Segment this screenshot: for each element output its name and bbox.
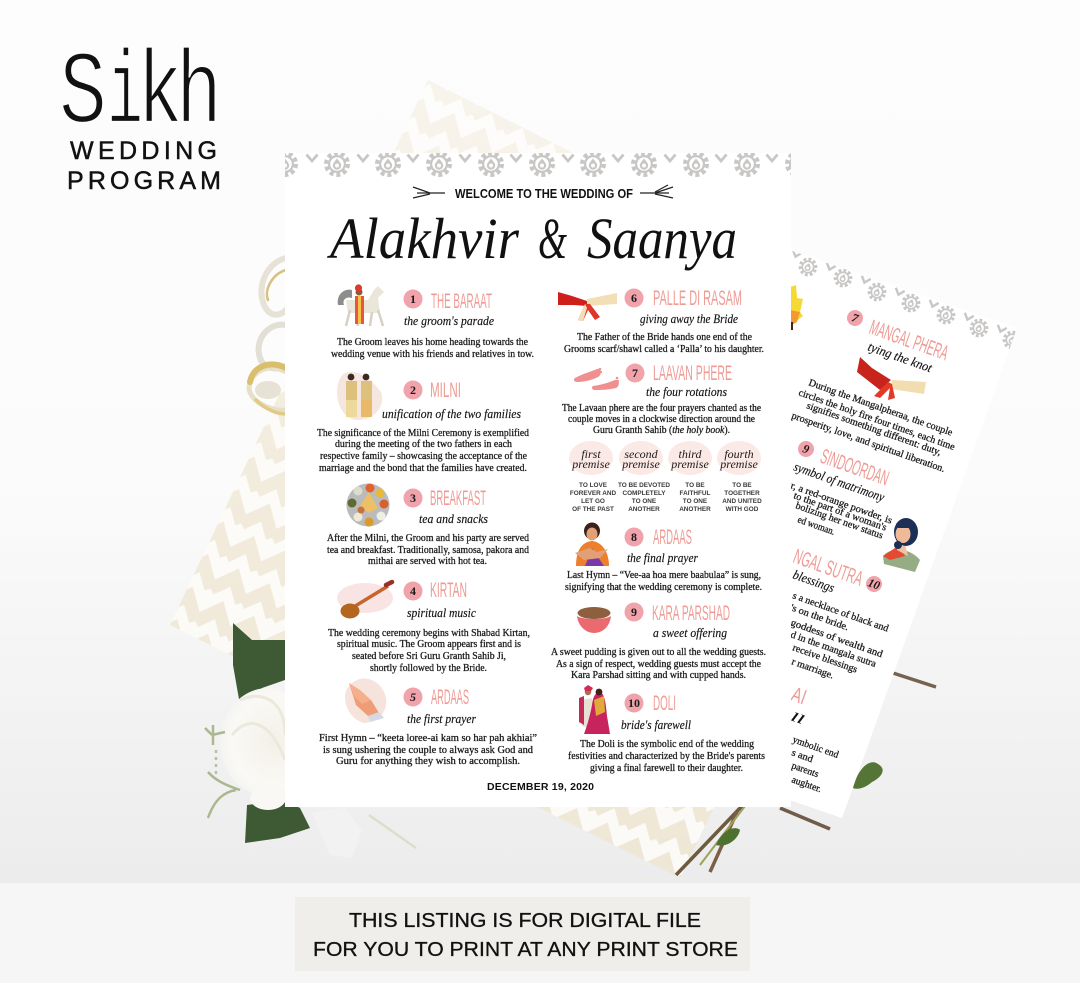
step 5: first ardaas: is sung ushering the couple to always ask God and xyxy=(323,745,533,756)
step 1: the baraat: wedding venue with his friends and relatives in tow. xyxy=(331,349,534,360)
premise 2: TO ONE xyxy=(632,498,657,505)
step 1: the baraat: the groom's parade xyxy=(404,313,494,328)
decorative border strip xyxy=(274,154,808,174)
step 9: kara parshad: 9 xyxy=(631,605,637,619)
icon: tied knot xyxy=(857,357,926,400)
step 4: kirtan: seated before Sri Guru Granth Sahib Ji, xyxy=(352,651,506,662)
step 3: breakfast: tea and snacks xyxy=(419,511,488,526)
back card decorative border xyxy=(791,250,1022,350)
premise 3: ANOTHER xyxy=(679,506,711,513)
step 4: kirtan: KIRTAN xyxy=(430,579,467,602)
back step 7: mangal phera: tying the knot xyxy=(866,339,935,375)
step 3: breakfast: tea and breakfast. Traditionally, samosa, pakora and xyxy=(327,545,529,556)
step 1: the baraat xyxy=(331,284,534,360)
step 5: first ardaas: First Hymn – “keeta loree-ai kam so har pah akhiai” xyxy=(319,733,537,744)
icon: bowl of pudding xyxy=(577,607,611,633)
step 10: doli: giving a final farewell to their daughter. xyxy=(590,763,743,774)
page title: Sikh wedding program: h xyxy=(176,36,222,154)
page title: Sikh wedding program: i xyxy=(107,36,143,154)
page title: Sikh wedding program: S xyxy=(59,36,107,154)
back step 10: mangal sutra: d in the mangala sutra xyxy=(789,629,878,670)
icon: thali plate xyxy=(346,484,390,526)
back step 9: sindoordan: bolizing her new status xyxy=(794,500,884,542)
couple names: Alakhvir xyxy=(326,206,519,271)
icon: praying hands xyxy=(345,678,386,723)
step 10: doli: The Doli is the symbolic end of the wedding xyxy=(580,739,754,750)
back step 10: mangal sutra: goddess of wealth and xyxy=(789,617,884,660)
step 9: kara parshad: a sweet offering xyxy=(653,625,727,640)
back step 7: mangal phera: 7 xyxy=(850,310,861,326)
digital file notice banner: FOR YOU TO PRINT AT ANY PRINT STORE xyxy=(313,938,738,961)
step 3: breakfast: mithai are served with hot tea. xyxy=(368,556,487,567)
step 6: palle di rasam: The Father of the Bride hands one end of the xyxy=(577,332,753,343)
step 10: doli: 10 xyxy=(628,696,640,710)
step 8: final ardaas: Last Hymn – “Vee-aa hoa mere baabulaa” is sung, xyxy=(567,570,761,581)
step 2: milni xyxy=(317,372,529,474)
premise 1: premise xyxy=(571,457,610,471)
chevron paper behind the cards xyxy=(170,80,940,878)
back step 10: mangal sutra: receive blessings xyxy=(791,642,859,676)
step 8: final ardaas: the final prayer xyxy=(627,550,699,565)
premise 4: WITH GOD xyxy=(726,506,759,513)
icon: sitar xyxy=(337,582,393,618)
step 5: first ardaas: ARDAAS xyxy=(431,686,469,709)
icon: footprints xyxy=(574,368,619,390)
premise 3: FAITHFUL xyxy=(680,490,711,497)
step 4: kirtan: shortly followed by the Bride. xyxy=(370,663,487,674)
back step 9: sindoordan: to the part of a woman's xyxy=(792,490,888,534)
premise 4: TO BE xyxy=(732,482,752,489)
step 10: doli: festivities and characterized by the Bride's parents xyxy=(568,751,765,762)
icon: red and cream scarf xyxy=(558,292,617,321)
back step 10: mangal sutra: s a necklace of black and xyxy=(791,590,890,635)
back step 7: mangal phera: circles the holy fire four times, each time xyxy=(797,387,957,453)
premise 4: fourth xyxy=(724,447,754,461)
step 2: milni: 2 xyxy=(410,383,416,397)
step 7: laavan phere: LAAVAN PHERE xyxy=(653,362,732,385)
back step 10: mangal sutra xyxy=(789,545,890,682)
premise 3: TO BE xyxy=(685,482,705,489)
digital file notice banner xyxy=(295,897,750,971)
step 5: first ardaas: Guru for anything they wish to accomplish. xyxy=(336,756,520,767)
icon: groom and horse xyxy=(338,284,384,326)
premise 1: TO LOVE xyxy=(579,482,608,489)
back step: doli fragment: ymbolic end xyxy=(791,734,840,761)
step 7: laavan phere: couple moves in a clockwise direction around the xyxy=(568,414,756,425)
step 9: kara parshad: Kara Parshad sitting and with cupped hands. xyxy=(571,670,746,681)
step 8: final ardaas: ARDAAS xyxy=(653,526,692,549)
step 2: milni: marriage and the bond that the families have created. xyxy=(319,463,527,474)
page title: Sikh wedding program: WEDDING xyxy=(70,137,217,165)
step 8: final ardaas: 8 xyxy=(631,530,637,544)
step 9: kara parshad: A sweet pudding is given out to all the wedding guests. xyxy=(551,647,766,658)
premise 3 xyxy=(668,441,712,513)
step 2: milni: respective family – showcasing the acceptance of the xyxy=(320,451,528,462)
premise 1: FOREVER AND xyxy=(570,490,617,497)
back step 7: mangal phera: During the Mangalpheraa, the couple xyxy=(807,377,954,439)
back step 10: mangal sutra: r marriage. xyxy=(790,656,835,682)
step 2: milni: MILNI xyxy=(430,379,461,402)
back step: doli fragment: s and xyxy=(790,747,814,765)
four premises xyxy=(569,441,762,513)
step 7: laavan phere: The Lavaan phere are the four prayers chanted as the xyxy=(562,403,762,414)
step 2: milni: unification of the two families xyxy=(382,406,521,421)
back step 7: mangal phera: signifies something different: duty, xyxy=(805,400,943,458)
back step: doli fragment xyxy=(788,683,840,795)
page title: Sikh wedding program: PROGRAM xyxy=(67,167,221,195)
premise 4: premise xyxy=(719,457,758,471)
step 6: palle di rasam: PALLE DI RASAM xyxy=(653,287,742,310)
back step 10: mangal sutra: 's on the bride. xyxy=(789,602,850,633)
front card: main program page xyxy=(274,153,808,807)
step 3: breakfast: BREAKFAST xyxy=(430,487,486,510)
premise 4: AND UNITED xyxy=(722,498,762,505)
step 10: doli: bride's farewell xyxy=(621,717,691,732)
page title: Sikh wedding program: k xyxy=(137,36,183,154)
couple names: & xyxy=(538,206,567,271)
premise 2: second xyxy=(624,447,659,461)
step 2: milni: The significance of the Milni Ceremony is exemplified xyxy=(317,428,529,439)
back step 10: mangal sutra: NGAL SUTRA xyxy=(790,545,866,591)
premise 1 xyxy=(569,441,617,513)
premise 4 xyxy=(717,441,762,513)
back step 7: mangal phera xyxy=(790,310,957,475)
premise 1: OF THE PAST xyxy=(572,506,614,513)
couple names: Saanya xyxy=(587,206,737,271)
premise 3: third xyxy=(679,447,702,461)
back step 10: mangal sutra: 10 xyxy=(866,575,882,593)
date: DECEMBER 19, 2020 xyxy=(487,781,594,793)
back step: doli fragment: aughter. xyxy=(790,774,823,795)
back step 7: mangal phera: prosperity, love, and spiritual liberation. xyxy=(790,410,946,475)
step 6: palle di rasam: 6 xyxy=(631,291,637,305)
back card: second program page xyxy=(791,251,1016,818)
back step: doli fragment: parents xyxy=(790,760,820,780)
step 9: kara parshad: As a sign of respect, wedding guests must accept the xyxy=(556,659,762,670)
premise 3: premise xyxy=(670,457,709,471)
premise 2 xyxy=(618,441,670,513)
step 4: kirtan xyxy=(328,579,530,674)
step 5: first ardaas: 5 xyxy=(410,690,416,704)
premise 1: first xyxy=(581,447,601,461)
twigs and leaves xyxy=(676,673,936,875)
welcome heading with sprigs: WELCOME TO THE WEDDING OF xyxy=(455,187,633,201)
step 7: laavan phere: the four rotations xyxy=(646,384,727,399)
back step 9: sindoordan: ed woman. xyxy=(796,514,836,538)
back step 9: sindoordan: r, a red-orange powder, is xyxy=(789,480,894,527)
back step: doli fragment: AI xyxy=(788,683,809,709)
step 8: final ardaas: signifying that the wedding ceremony is complete. xyxy=(565,582,762,593)
step 3: breakfast xyxy=(327,484,529,567)
step 4: kirtan: The wedding ceremony begins with Shabad Kirtan, xyxy=(328,628,530,639)
premise 2: COMPLETELY xyxy=(622,490,666,497)
step 7: laavan phere xyxy=(562,362,762,436)
step 5: first ardaas xyxy=(319,678,537,767)
welcome heading with sprigs xyxy=(413,185,673,201)
step 9: kara parshad xyxy=(551,602,766,681)
back step 9: sindoordan: symbol of matrimony xyxy=(792,459,887,505)
step 7: laavan phere: 7 xyxy=(632,366,638,380)
back step 9: sindoordan: 9 xyxy=(801,441,811,457)
step 2: milni: during the meeting of the two fathers in each xyxy=(335,439,512,450)
back step 10: mangal sutra: blessings xyxy=(791,567,837,595)
step 7: laavan phere: Guru Granth Sahib (the holy book). xyxy=(593,425,730,436)
icon: bride and groom xyxy=(579,685,610,734)
page title: Sikh wedding program xyxy=(59,36,222,195)
icon: holy fire xyxy=(785,285,803,330)
step 1: the baraat: 1 xyxy=(410,292,416,306)
back step 9: sindoordan: SINDOORDAN xyxy=(817,445,892,490)
premise 2: TO BE DEVOTED xyxy=(618,482,670,489)
step 3: breakfast: After the Milni, the Groom and his party are served xyxy=(327,533,529,544)
step 1: the baraat: THE BARAAT xyxy=(431,290,492,313)
couple names xyxy=(326,206,737,271)
premise 2: ANOTHER xyxy=(628,506,660,513)
icon: woman praying xyxy=(575,522,609,566)
premise 3: TO ONE xyxy=(683,498,708,505)
step 10: doli xyxy=(568,685,765,774)
step 5: first ardaas: the first prayer xyxy=(407,711,477,726)
step 4: kirtan: 4 xyxy=(410,584,416,598)
back step 7: mangal phera: MANGAL PHERA xyxy=(866,316,951,365)
step 6: palle di rasam: giving away the Bride xyxy=(640,311,738,326)
step 8: final ardaas xyxy=(565,522,762,593)
premise 4: TOGETHER xyxy=(724,490,760,497)
premise 2: premise xyxy=(621,457,660,471)
step 6: palle di rasam xyxy=(558,287,764,355)
flower bouquet: rose and leaves xyxy=(205,623,416,858)
step 4: kirtan: spiritual music xyxy=(407,605,476,620)
back step 9: sindoordan xyxy=(789,441,920,572)
step 9: kara parshad: KARA PARSHAD xyxy=(652,602,730,625)
icon: two fathers xyxy=(337,372,382,420)
step 1: the baraat: The Groom leaves his home heading towards the xyxy=(337,337,529,348)
gold ribbon curls xyxy=(249,258,286,414)
step 3: breakfast: 3 xyxy=(410,491,416,505)
digital file notice banner: THIS LISTING IS FOR DIGITAL FILE xyxy=(349,909,701,932)
premise 1: LET GO xyxy=(581,498,605,505)
icon: woman with sindoor xyxy=(883,518,920,572)
step 10: doli: DOLI xyxy=(653,692,676,715)
step 6: palle di rasam: Grooms scarf/shawl called a ‘Palla’ to his daughter. xyxy=(564,344,764,355)
step 4: kirtan: spiritual music. The Groom appears first and is xyxy=(337,639,521,650)
back step: doli fragment: ll xyxy=(789,709,807,727)
